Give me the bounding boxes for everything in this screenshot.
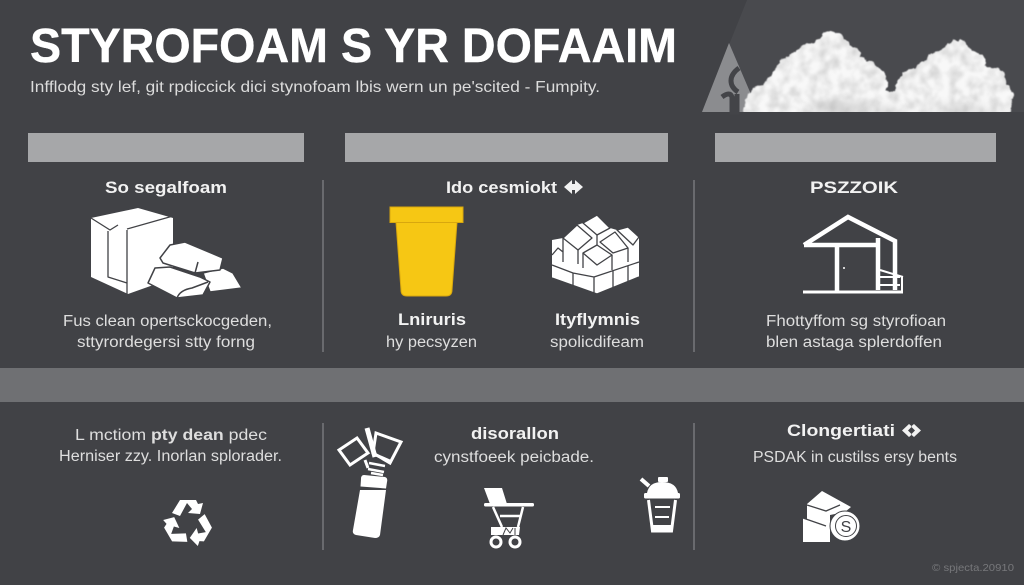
panel: disposal column — [339, 424, 680, 547]
text: cost description: PSDAK in custilss ersy bents — [753, 449, 957, 466]
label: cup: Lniruris — [398, 310, 466, 329]
icon: grey triangle emblem — [702, 43, 750, 112]
icon: cart — [484, 488, 534, 547]
panel: middle divider band — [0, 368, 1024, 402]
label: cubes — [550, 310, 644, 351]
header backdrop: diagonal panel — [702, 0, 1024, 112]
heading: foam blocks: So segalfoam — [105, 178, 227, 197]
panel: recycling column — [59, 427, 282, 548]
icon: foam cube stack — [552, 215, 639, 294]
footer copyright: © spjecta.20910 — [932, 562, 1014, 574]
icon: lidded cup — [641, 477, 680, 532]
text: foam blocks description: Fus clean opertsckocgeden, — [63, 313, 272, 330]
icon: bottle with packets — [339, 428, 401, 538]
text: house description: blen astaga splerdoffen — [766, 334, 942, 351]
label: cup: hy pecsyzen — [386, 334, 477, 351]
text: foam blocks description: sttyrordegersi stty forng — [77, 334, 255, 351]
icon: foam box and blocks — [91, 208, 242, 298]
text: recycling description: L mctiom pty dean pdec — [75, 427, 267, 444]
icon: house outline — [803, 217, 903, 292]
panel: top header bar left — [28, 133, 304, 162]
text: recycling description — [59, 427, 282, 465]
heading: cost: Clongertiati — [787, 421, 895, 440]
text: house description: Fhottyffom sg styrofioan — [766, 313, 946, 330]
title: STYROFOAM S YR DOFAAIM — [30, 20, 677, 73]
text: house description — [766, 313, 946, 351]
panel: foam blocks column — [63, 178, 272, 351]
subtitle: Infflodg sty lef, git rpdiccick dici stynofoam lbis wern un pe'scited - Fumpity. — [30, 79, 600, 96]
icon: double arrow — [564, 180, 583, 194]
heading: cups and cubes: Ido cesmiokt — [446, 178, 557, 197]
text: recycling description: Herniser zzy. Inorlan splorader. — [59, 448, 282, 465]
text: foam blocks description — [63, 313, 272, 351]
label: cup — [386, 310, 477, 351]
icon: box and dollar coin: S — [841, 519, 851, 536]
icon: recycle symbol — [161, 500, 216, 548]
icon: yellow cup — [390, 207, 463, 296]
label: cubes: Ityflymnis — [555, 310, 640, 329]
label: cubes: spolicdifeam — [550, 334, 644, 351]
panel: top header bar right — [715, 133, 996, 162]
panel: cups and cubes column — [386, 178, 644, 351]
panel: house column — [766, 178, 946, 351]
image: styrofoam foam clouds — [742, 31, 1013, 120]
heading: disposal: disorallon — [471, 424, 559, 443]
heading: house: PSZZOIK — [810, 178, 899, 197]
icon: code arrows — [902, 424, 921, 437]
panel: cost column — [753, 421, 957, 542]
icon: box and dollar coin — [803, 491, 860, 542]
text: disposal description: cynstfoeek peicbade. — [434, 449, 594, 466]
panel: top header bar centre — [345, 133, 668, 162]
